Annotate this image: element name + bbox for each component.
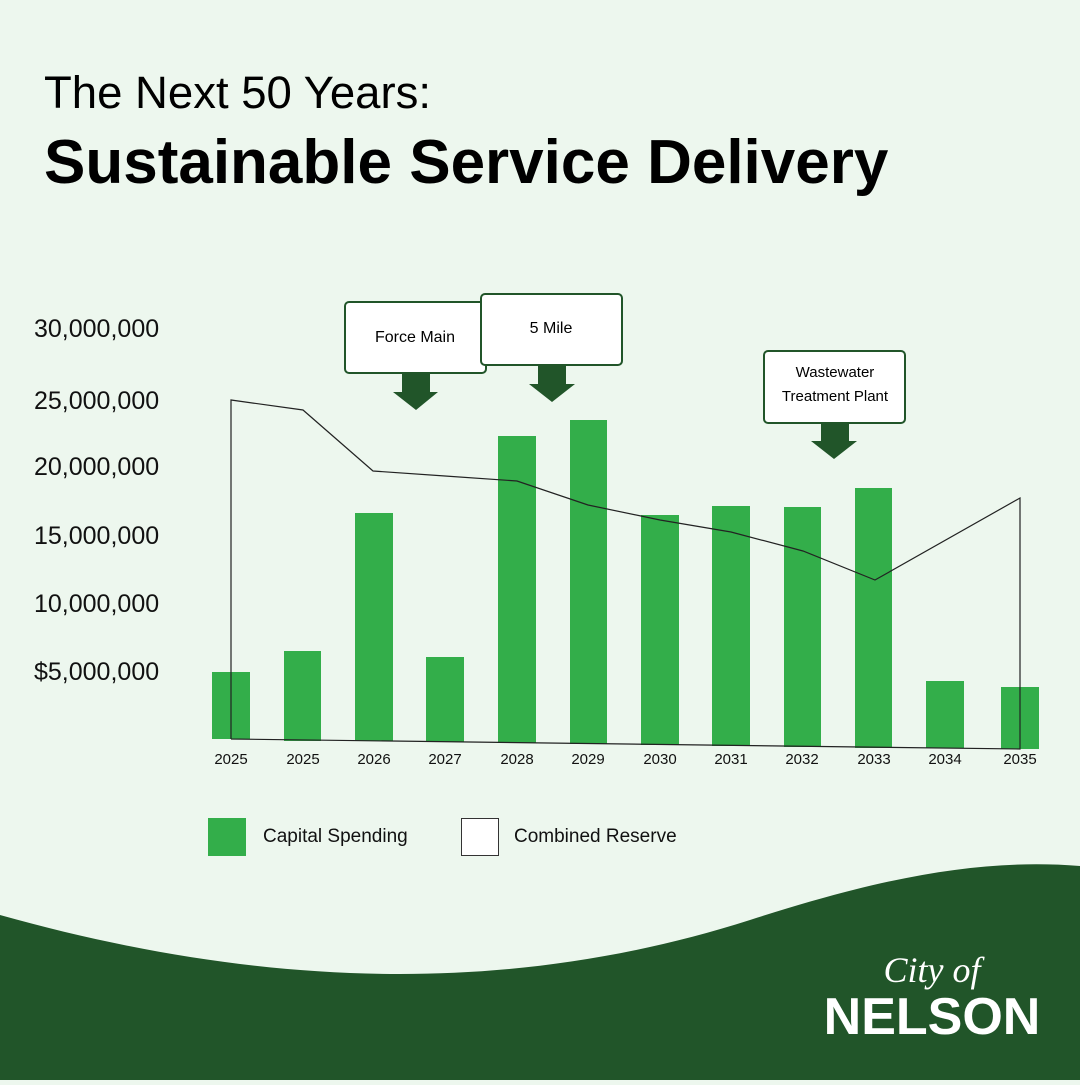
x axis labels: 2032 (785, 751, 819, 768)
legend: Capital Spending (263, 826, 408, 847)
x axis labels (214, 751, 1037, 768)
bar chart: capital spending (212, 420, 1039, 749)
callout: Wastewater Treatment Plant: Treatment Plant (782, 388, 889, 405)
y axis labels: 25,000,000 (34, 387, 159, 415)
y axis labels: 30,000,000 (34, 315, 159, 343)
legend (208, 818, 677, 856)
logo: City of Nelson: City of (884, 950, 985, 990)
x axis labels: 2027 (428, 751, 462, 768)
callout: Wastewater Treatment Plant: Wastewater (796, 364, 874, 381)
y axis labels: $5,000,000 (34, 658, 159, 686)
logo: City of Nelson (824, 950, 1040, 1046)
y axis labels: 20,000,000 (34, 453, 159, 481)
x axis labels: 2025 (286, 751, 320, 768)
x axis labels: 2030 (643, 751, 677, 768)
line chart: combined reserve (231, 400, 1020, 749)
title: The Next 50 Years: (44, 67, 431, 118)
y axis labels: 15,000,000 (34, 522, 159, 550)
callout: Wastewater Treatment Plant (764, 351, 905, 459)
callout: 5 Mile (481, 294, 622, 402)
x axis labels: 2034 (928, 751, 962, 768)
x axis labels: 2031 (714, 751, 748, 768)
x axis labels: 2025 (214, 751, 248, 768)
x axis labels: 2033 (857, 751, 891, 768)
logo: City of Nelson: NELSON (824, 988, 1040, 1046)
x axis labels: 2029 (571, 751, 605, 768)
x axis labels: 2028 (500, 751, 534, 768)
footer wave (0, 864, 1080, 1080)
title (44, 67, 889, 197)
x axis labels: 2035 (1003, 751, 1037, 768)
y axis labels: 10,000,000 (34, 590, 159, 618)
y axis labels (34, 315, 159, 686)
legend: Combined Reserve (514, 826, 677, 847)
callout: Force Main: Force Main (375, 329, 455, 346)
x axis labels: 2026 (357, 751, 391, 768)
callout: Force Main (345, 302, 486, 410)
title: Sustainable Service Delivery (44, 128, 889, 197)
callout: 5 Mile: 5 Mile (530, 320, 572, 337)
